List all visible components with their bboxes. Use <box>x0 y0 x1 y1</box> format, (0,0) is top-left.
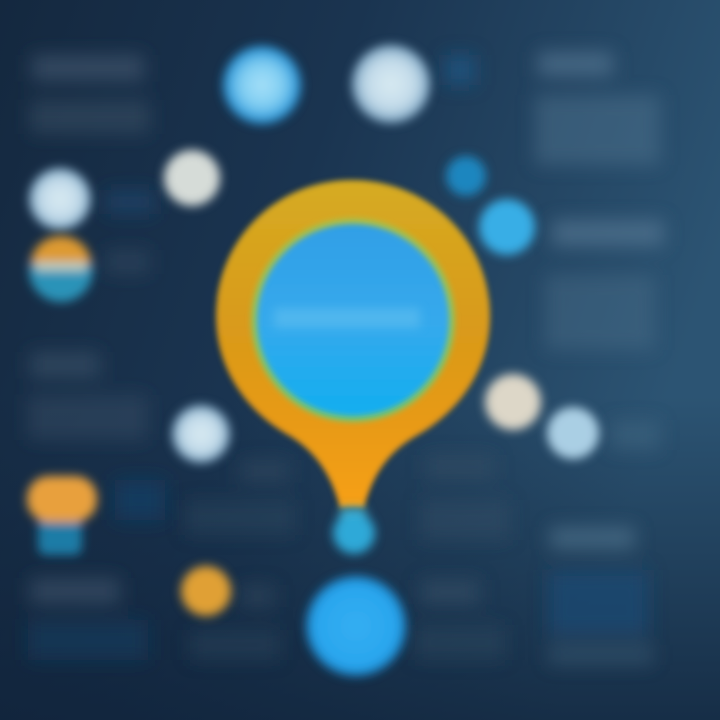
pin blue lens <box>257 224 449 416</box>
pin body <box>216 180 490 508</box>
icon: lower left pale circle <box>172 405 230 463</box>
icon: small orange circle <box>181 566 231 616</box>
icon: right blue circle <box>479 199 535 255</box>
icon: top white circle <box>352 45 430 123</box>
central location pin <box>216 180 490 508</box>
icon: orange and teal badge <box>29 236 93 302</box>
text placeholders: centre column <box>185 55 510 660</box>
text placeholders: right column <box>535 52 664 665</box>
icon: cream circle <box>164 150 220 206</box>
icon: orange pill with teal base <box>27 476 97 555</box>
text placeholders: left column <box>28 55 165 660</box>
icon: lower right pale circle <box>547 407 599 459</box>
icon: lower right cream circle <box>485 374 541 430</box>
pin connector <box>333 508 375 554</box>
icon: top blue circle <box>223 46 301 124</box>
icon: upper left white circle <box>29 168 91 230</box>
bottom blue circle <box>306 576 406 676</box>
lens label <box>274 308 420 328</box>
pin inner ring <box>251 218 455 422</box>
icon: small dark blue circle <box>446 156 486 196</box>
